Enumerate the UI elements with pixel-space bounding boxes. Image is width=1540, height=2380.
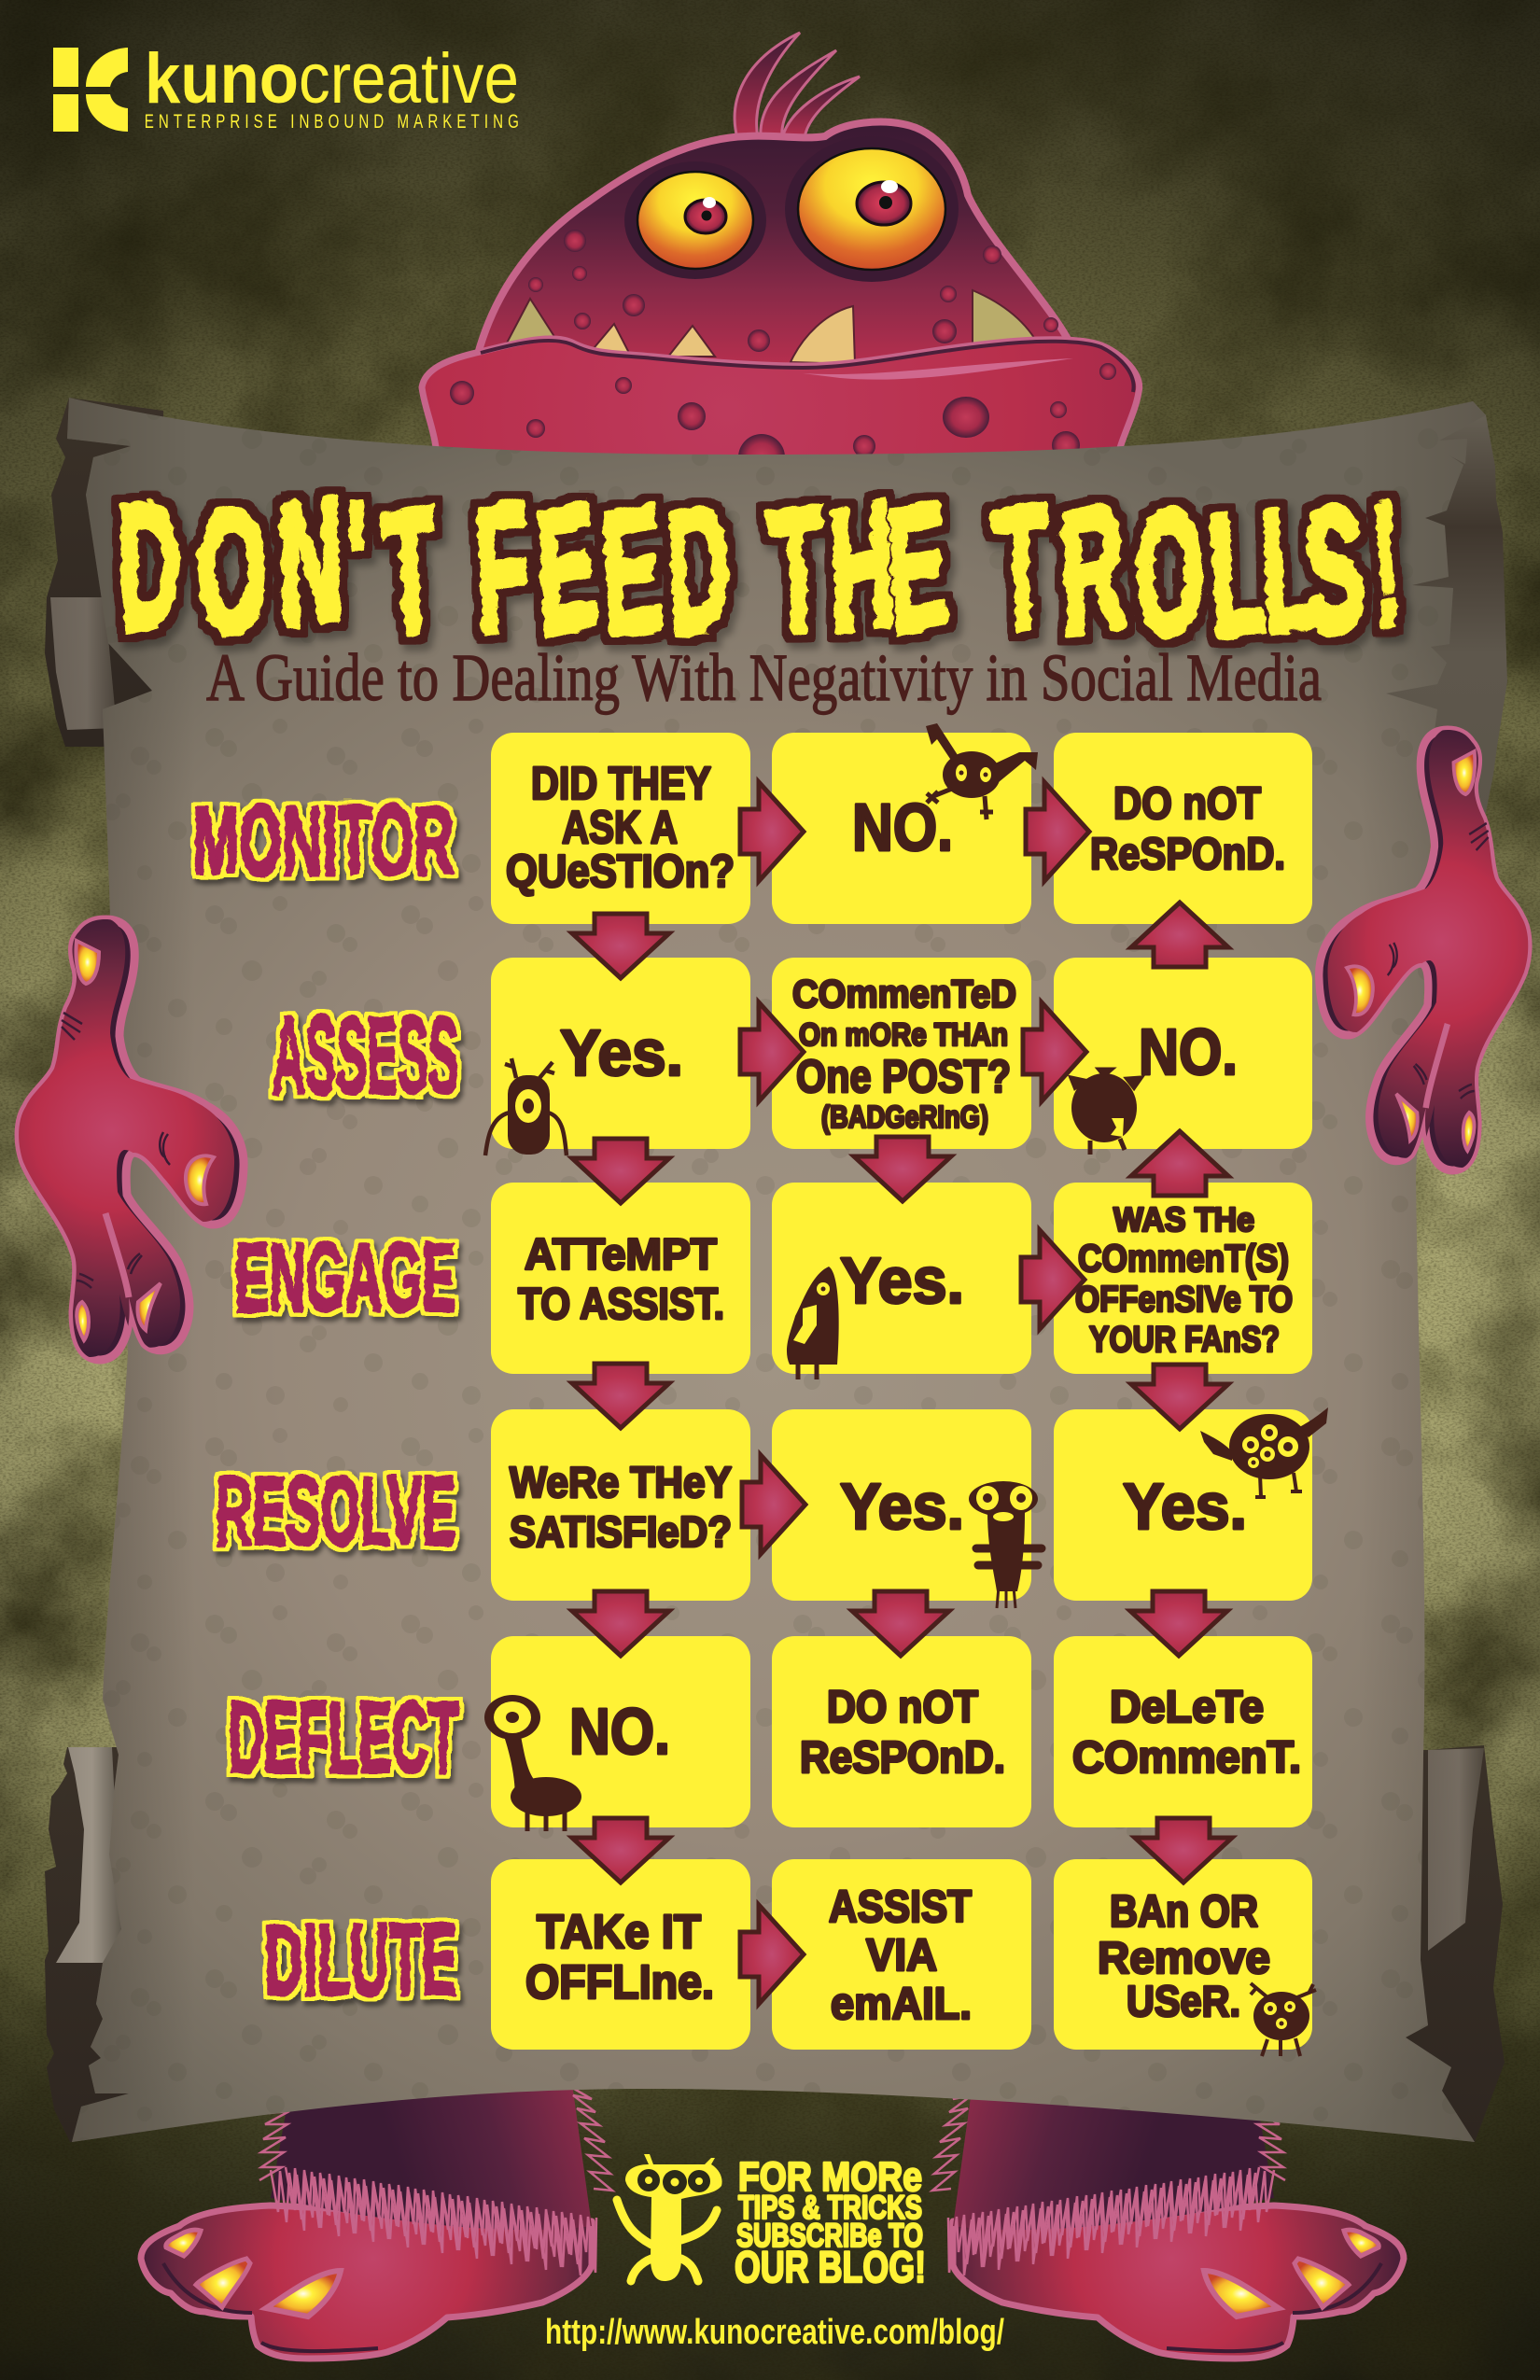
icon: goggle-eyed stalk creature [969, 1481, 1042, 1608]
text: did they ask a question: DID THEY [531, 759, 711, 809]
lip [422, 339, 1140, 467]
text: assist via email: emAIL. [831, 1980, 972, 2029]
text: do not respond: ReSPOnD. [1090, 830, 1285, 879]
text: were they satisfied: SATISFIeD? [510, 1507, 732, 1556]
lip highlight [803, 358, 1073, 380]
text: assist via email: VIA [866, 1931, 937, 1981]
troll: left hand [9, 917, 244, 1360]
wordmark: kuno [145, 39, 299, 119]
text: delete comment: DeLeTe [1110, 1683, 1264, 1732]
icon: K mark [53, 48, 128, 132]
logo: kuno creative [53, 39, 519, 133]
label: Engage: ENGAGE [233, 1223, 455, 1331]
text: take it offline: TAKe IT [537, 1905, 701, 1958]
text: for more tips and tricks subscribe to our blog: FOR MORe [738, 2154, 922, 2200]
small creatures [484, 723, 1328, 2056]
arrow: right [740, 782, 804, 881]
icon: yellow mascot [617, 2154, 722, 2281]
text: was the comment offensive to your fans: YOUR FAnS? [1089, 1320, 1280, 1360]
text: ASSESS [271, 993, 457, 1116]
text: did they ask a question: QUeSTIOn? [506, 847, 735, 897]
text: yes: Yes. [840, 1470, 964, 1543]
troll: head [422, 33, 1140, 481]
text: take it offline: OFFLIne. [525, 1955, 714, 2009]
icon: long-neck one-eyed creature [484, 1695, 581, 1831]
text: for more tips and tricks subscribe to our blog: SUBSCRIBe TO [736, 2218, 923, 2254]
troll: right hand [1319, 727, 1537, 1170]
text: ban or remove user: BAn OR [1110, 1887, 1258, 1937]
text: did they ask a question: ASK A [562, 803, 678, 853]
arrow: down [572, 1139, 669, 1203]
text: commented on more than one post: On mORe THAn [799, 1017, 1008, 1053]
text: no: NO. [1139, 1015, 1238, 1088]
right eye [785, 136, 959, 282]
arrow: right [1021, 1230, 1085, 1329]
lip bumps [450, 363, 1116, 481]
text: do not respond: ReSPOnD. [800, 1733, 1005, 1783]
icon: one-eyed creature with antlers [485, 1058, 567, 1155]
icon: creature with antenna and wing [926, 723, 1038, 819]
label: Resolve: RESOLVE [214, 1456, 455, 1564]
label: Dilute: DILUTE [263, 1901, 455, 2014]
arrow: right [1026, 782, 1089, 881]
text: no: NO. [569, 1695, 670, 1768]
arrow: right [740, 1905, 804, 2004]
arrow: down [572, 1364, 669, 1428]
text: do not respond: DO nOT [827, 1683, 978, 1732]
left eye [624, 161, 766, 279]
left foot [141, 2077, 612, 2359]
text: yes: Yes. [1123, 1470, 1247, 1543]
text: yes: Yes. [840, 1244, 964, 1317]
text: yes: Yes. [560, 1016, 683, 1089]
label: Monitor: MONITOR [191, 786, 453, 894]
footer callout [545, 2154, 1004, 2352]
arrow: right [740, 1002, 804, 1101]
arrow: right [742, 1455, 805, 1554]
arrows [572, 782, 1232, 2004]
wordmark: creative [299, 39, 519, 119]
left top strip [45, 398, 163, 747]
scroll: torn back strips [45, 398, 1507, 2142]
icon: tall open-mouth creature [787, 1267, 839, 1379]
text: commented on more than one post: One POST? [796, 1052, 1011, 1102]
text: for more tips and tricks subscribe to our blog: TIPS & TRICKS [738, 2190, 922, 2226]
text: commented on more than one post: (BADGeRInG) [821, 1099, 988, 1134]
text: commented on more than one post: COmmenTeD [792, 972, 1016, 1015]
icon: many-eyed winged creature [1200, 1407, 1328, 1497]
scroll: main paper panel [67, 398, 1486, 2142]
text: blog url: http://www.kunocreative.com/blog/ [545, 2313, 1004, 2352]
arrow: down [1130, 1591, 1227, 1656]
text: ban or remove user: Remove [1098, 1934, 1270, 1983]
text: ban or remove user: USeR. [1127, 1977, 1240, 2025]
text: was the comment offensive to your fans: COmmenT(S) [1078, 1237, 1289, 1280]
text: for more tips and tricks subscribe to our blog: OUR BLOG! [735, 2242, 926, 2291]
right foot [932, 2077, 1404, 2359]
flowchart boxes [491, 733, 1312, 2050]
face [474, 122, 1073, 401]
left bottom strip [45, 1747, 140, 2142]
teeth [503, 290, 1040, 364]
tagline: ENTERPRISE INBOUND MARKETING [145, 109, 519, 133]
text: attempt to assist: ATTeMPT [525, 1229, 717, 1279]
arrow: down [1135, 1818, 1232, 1883]
right bottom strip [1400, 1745, 1505, 2142]
hair [735, 33, 860, 138]
troll: feet and legs [141, 2077, 1404, 2359]
arrow: down [572, 1591, 669, 1656]
title: DON'T FEED THE TROLLS! [112, 459, 1404, 672]
icon: round blob creature [1071, 1070, 1141, 1155]
text: DEFLECT [227, 1679, 457, 1792]
skin spots [528, 230, 1058, 352]
text: attempt to assist: TO ASSIST. [518, 1279, 724, 1328]
text: was the comment offensive to your fans: WAS THe [1113, 1200, 1254, 1239]
right top strip [1381, 401, 1507, 821]
text: delete comment: COmmenT. [1072, 1733, 1301, 1783]
arrow: up [1131, 903, 1228, 967]
text: no: NO. [852, 791, 953, 865]
arrow: up [1131, 1131, 1228, 1196]
icon: small antlered creature [1251, 1983, 1316, 2056]
text: do not respond: DO nOT [1113, 779, 1261, 829]
text: assist via email: ASSIST [829, 1883, 972, 1932]
arrow: down [572, 914, 669, 978]
stage labels [191, 786, 457, 2014]
box text [506, 759, 1301, 2029]
text: were they satisfied: WeRe THeY [510, 1458, 732, 1506]
arrow: down [1131, 1365, 1228, 1429]
arrow: down [572, 1818, 669, 1883]
text: was the comment offensive to your fans: OFFenSIVe TO [1075, 1280, 1293, 1320]
arrow: down [852, 1591, 949, 1656]
arrow: right [1023, 1002, 1086, 1101]
arrow: down [854, 1137, 951, 1201]
